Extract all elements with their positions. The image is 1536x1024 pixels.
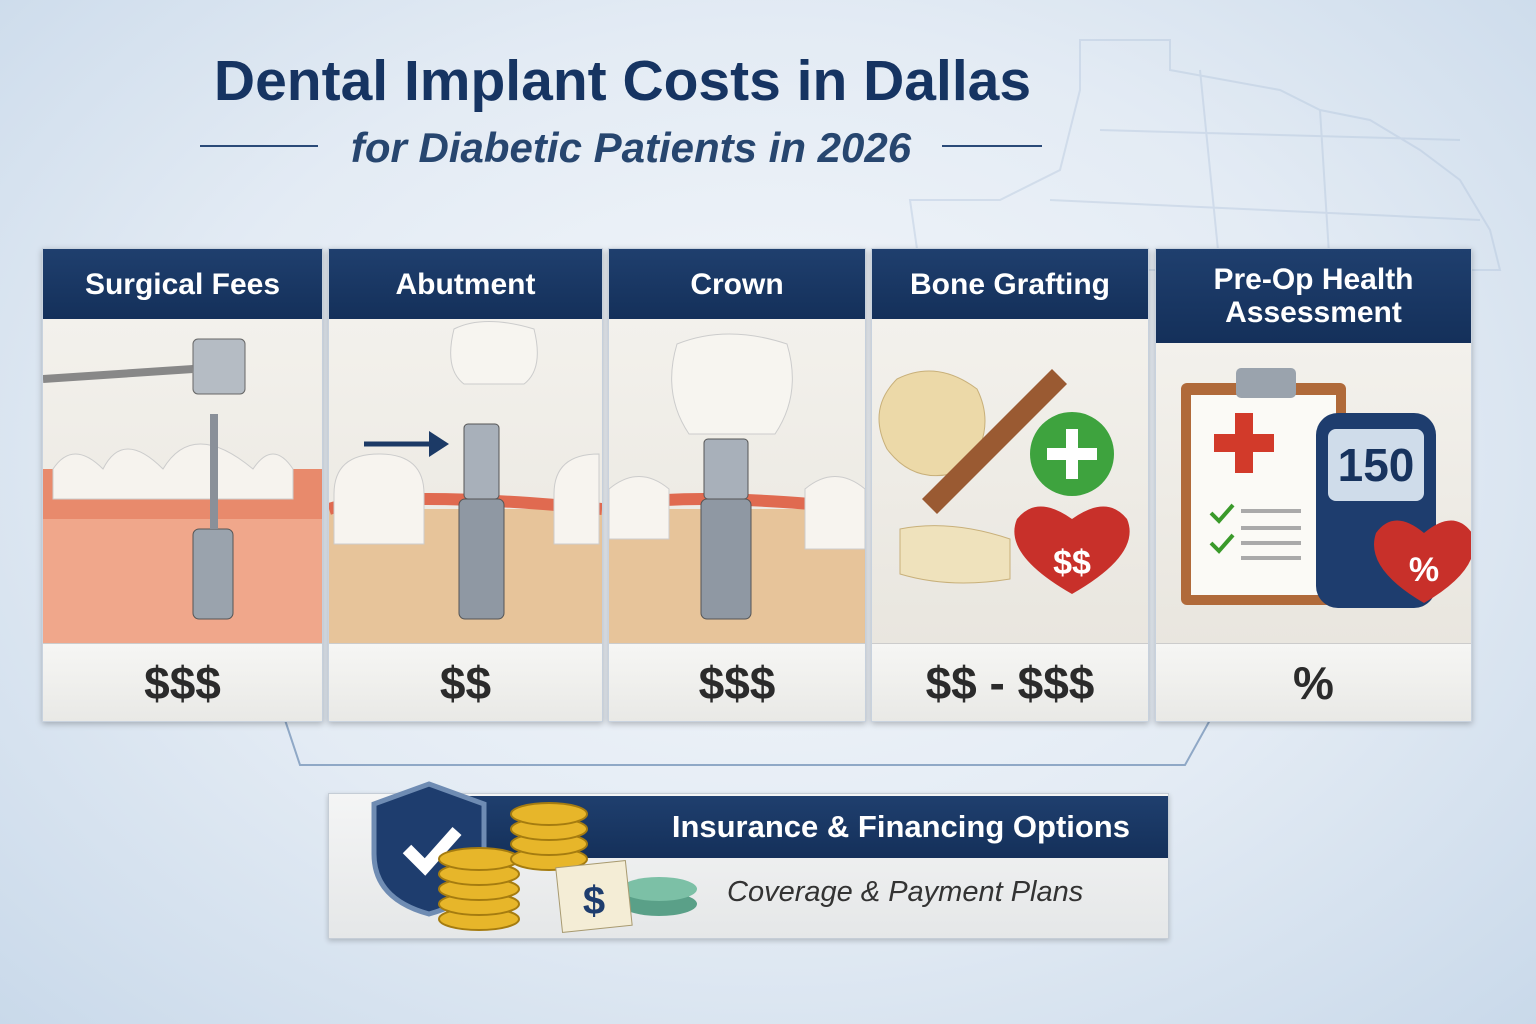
- panel: abutment: [328, 248, 603, 722]
- panel: bone grafting: Bone Grafting: [910, 268, 1110, 300]
- price: $$$: [144, 656, 221, 708]
- title: Dental Implant Costs in Dallas: [214, 49, 1031, 113]
- header: Surgical Fees: [85, 268, 280, 300]
- illustration: clipboard and glucose meter: 150: [1338, 439, 1414, 491]
- panel: insurance & financing: [328, 793, 1169, 939]
- panel: crown: [608, 248, 866, 722]
- panel: surgical fees: [42, 248, 323, 722]
- decorative map outline: [909, 39, 1501, 271]
- illustration: bone graft: [872, 319, 1148, 644]
- panel: abutment: $$: [440, 656, 491, 708]
- panel: pre-op health assessment: [1155, 248, 1472, 722]
- illustration: clipboard and glucose meter: [1156, 343, 1471, 644]
- header band: [449, 796, 1168, 858]
- header band: Insurance & Financing Options: [672, 809, 1130, 844]
- illustration: abutment: [329, 319, 602, 644]
- panel: pre-op health assessment: Pre-Op Health: [1213, 263, 1414, 296]
- subtext: Coverage & Payment Plans: [727, 876, 1083, 908]
- panel: abutment: Abutment: [396, 268, 535, 300]
- illustration: clipboard and glucose meter: %: [1409, 551, 1439, 589]
- icon: shield, coins, money: [372, 781, 697, 933]
- panel: bone grafting: $$ - $$$: [926, 656, 1094, 708]
- header: [43, 249, 322, 319]
- panel: crown: $$$: [699, 656, 775, 708]
- illustration: bone graft: $$: [1053, 544, 1091, 582]
- panel: pre-op health assessment: %: [1293, 656, 1334, 708]
- price: [43, 643, 322, 721]
- icon: shield, coins, money: $: [583, 879, 605, 923]
- panel: pre-op health assessment: Assessment: [1225, 296, 1402, 329]
- panel: bone grafting: [871, 248, 1149, 722]
- subtitle: for Diabetic Patients in 2026: [351, 124, 911, 171]
- panel: crown: Crown: [690, 268, 784, 300]
- illustration: drill implant: [43, 319, 322, 644]
- illustration: crown: [609, 319, 865, 644]
